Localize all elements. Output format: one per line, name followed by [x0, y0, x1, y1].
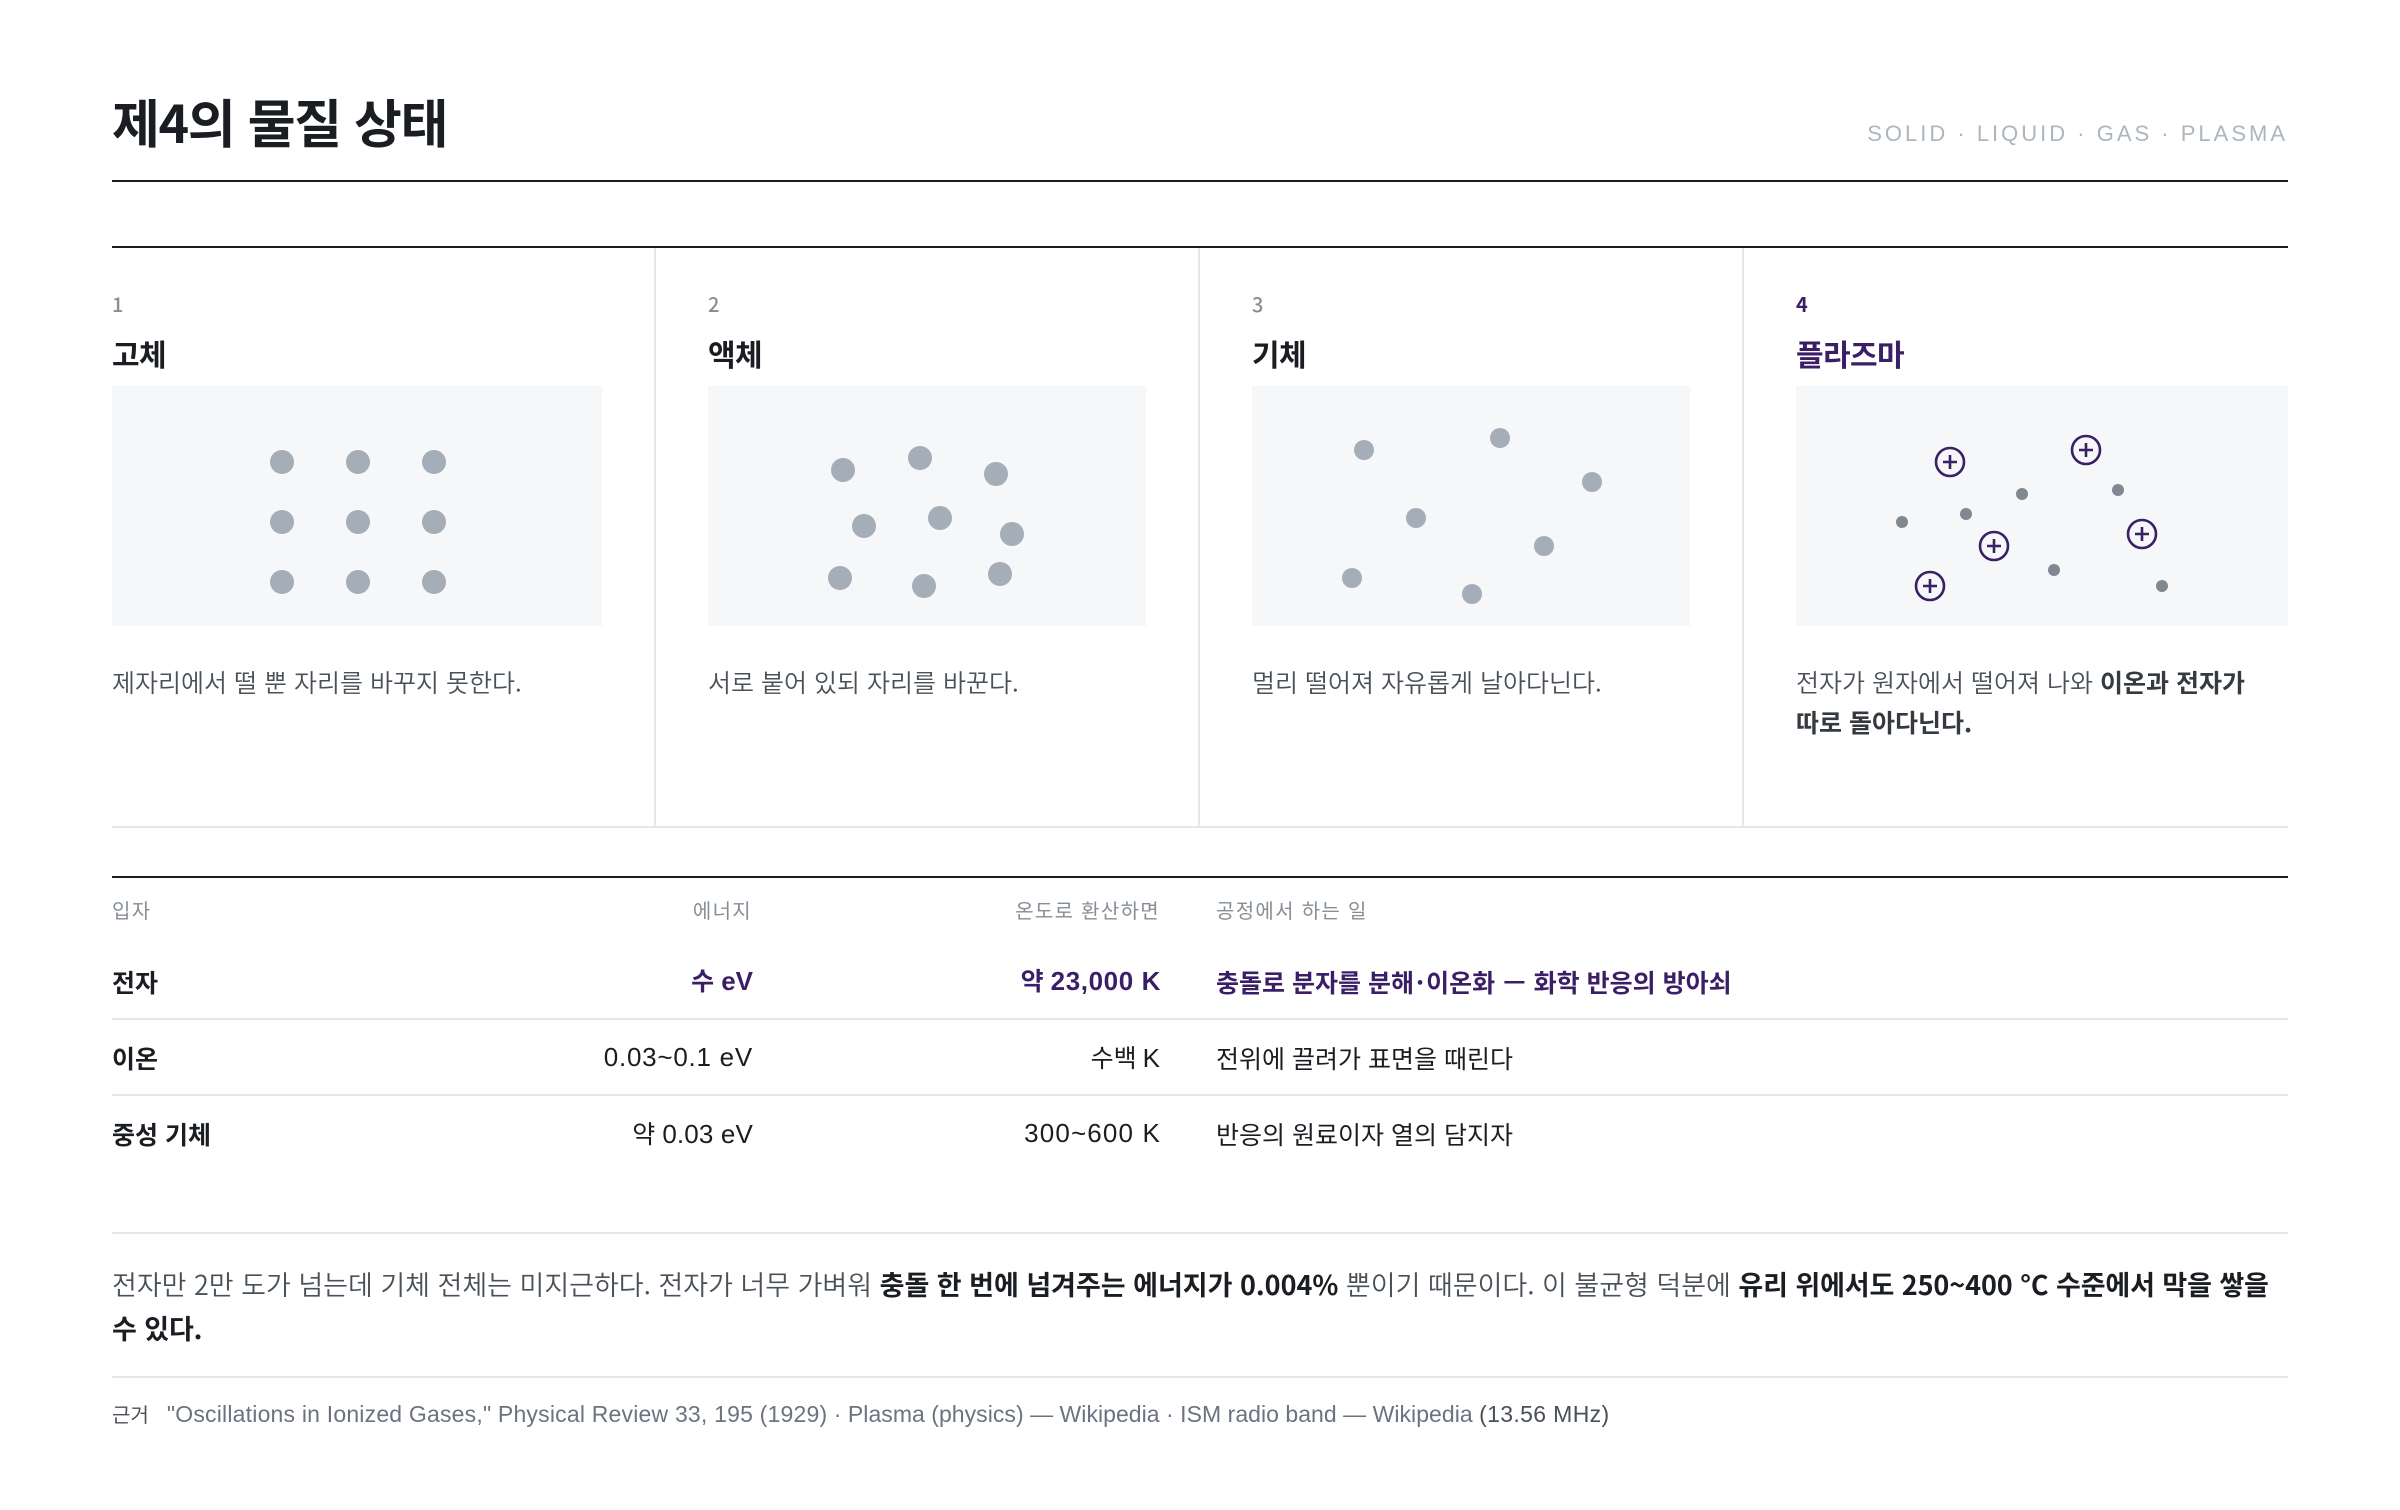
panel heading: gas: 기체: [1252, 331, 1306, 375]
table: particle comparison: [112, 895, 2288, 1152]
panel: plasma: [1796, 289, 2288, 740]
row: electron: 충돌로 분자를 분해·이온화 — 화학 반응의 방아쇠: [1216, 964, 1732, 1000]
panel heading: solid: 고체: [112, 331, 166, 375]
panel number 3: 3: [1252, 289, 1263, 318]
panel: gas: [1252, 289, 1690, 700]
panel heading: liquid: 액체: [708, 331, 762, 375]
description: gas: 멀리 떨어져 자유롭게 날아다닌다.: [1252, 664, 1602, 700]
description: solid: 제자리에서 떨 뿐 자리를 바꾸지 못한다.: [112, 664, 522, 700]
row: neutral gas: 중성 기체: [112, 1116, 211, 1152]
ions: [1916, 436, 2156, 600]
row: electron: 수 eV: [691, 962, 753, 998]
row: electron: 전자: [112, 964, 158, 1000]
row: ion: [112, 1039, 1513, 1076]
diagram: liquid particles close together: [708, 386, 1146, 626]
row: neutral gas: [112, 1115, 1513, 1152]
panel number 4: 4: [1796, 289, 1808, 318]
explanatory paragraph: 전자만 2만 도가 넘는데 기체 전체는 미지근하다. 전자가 너무 가벼워 충돌 한 번에 넘겨주는 에너지가 0.004% 뿐이기 때문이다. 이 불균형 덕분에 유리 위에서도 250~400 °C 수준에서 막을 쌓을 수 있다.: [112, 1264, 2269, 1347]
row: ion: 전위에 끌려가 표면을 때린다: [1216, 1040, 1513, 1076]
table header: 에너지: [693, 895, 752, 924]
row: electron: [112, 962, 1732, 1000]
row: neutral gas: 반응의 원료이자 열의 담지자: [1216, 1116, 1513, 1152]
panel number 1: 1: [112, 289, 123, 318]
description: plasma: 전자가 원자에서 떨어져 나와 이온과 전자가: [1796, 664, 2245, 700]
diagram: plasma ions and electrons: [1796, 386, 2288, 626]
row: neutral gas: 약 0.03 eV: [632, 1115, 753, 1151]
electrons: [1896, 484, 2168, 592]
diagram: gas particles far apart: [1252, 386, 1690, 626]
panel: liquid: [708, 289, 1146, 700]
title: 제4의 물질 상태: [112, 83, 447, 158]
row: electron: 약 23,000 K: [1021, 962, 1161, 998]
row: ion: 수백 K: [1091, 1039, 1161, 1075]
panel: solid: [112, 289, 602, 700]
panel heading: plasma: 플라즈마: [1796, 331, 1904, 375]
sources footer: 근거 "Oscillations in Ionized Gases," Physical Review 33, 195 (1929) · Plasma (physics) — Wikipedia · ISM radio band — Wikipedia (13.56 MHz): [112, 1399, 1610, 1428]
subtitle: four states: SOLID · LIQUID · GAS · PLASMA: [1867, 121, 2288, 146]
row: ion: 0.03~0.1 eV: [604, 1042, 753, 1072]
description: plasma: [1796, 664, 2245, 740]
row: neutral gas: 300~600 K: [1024, 1118, 1161, 1148]
table header: 공정에서 하는 일: [1216, 895, 1368, 924]
description: plasma: 따로 돌아다닌다.: [1796, 704, 1972, 740]
table header: 온도로 환산하면: [1015, 895, 1160, 924]
description: liquid: 서로 붙어 있되 자리를 바꾼다.: [708, 664, 1019, 700]
panel number 2: 2: [708, 289, 719, 318]
diagram: solid particles in a lattice: [112, 386, 602, 626]
table header: [112, 895, 1368, 924]
table header: 입자: [112, 895, 151, 924]
row: ion: 이온: [112, 1040, 158, 1076]
